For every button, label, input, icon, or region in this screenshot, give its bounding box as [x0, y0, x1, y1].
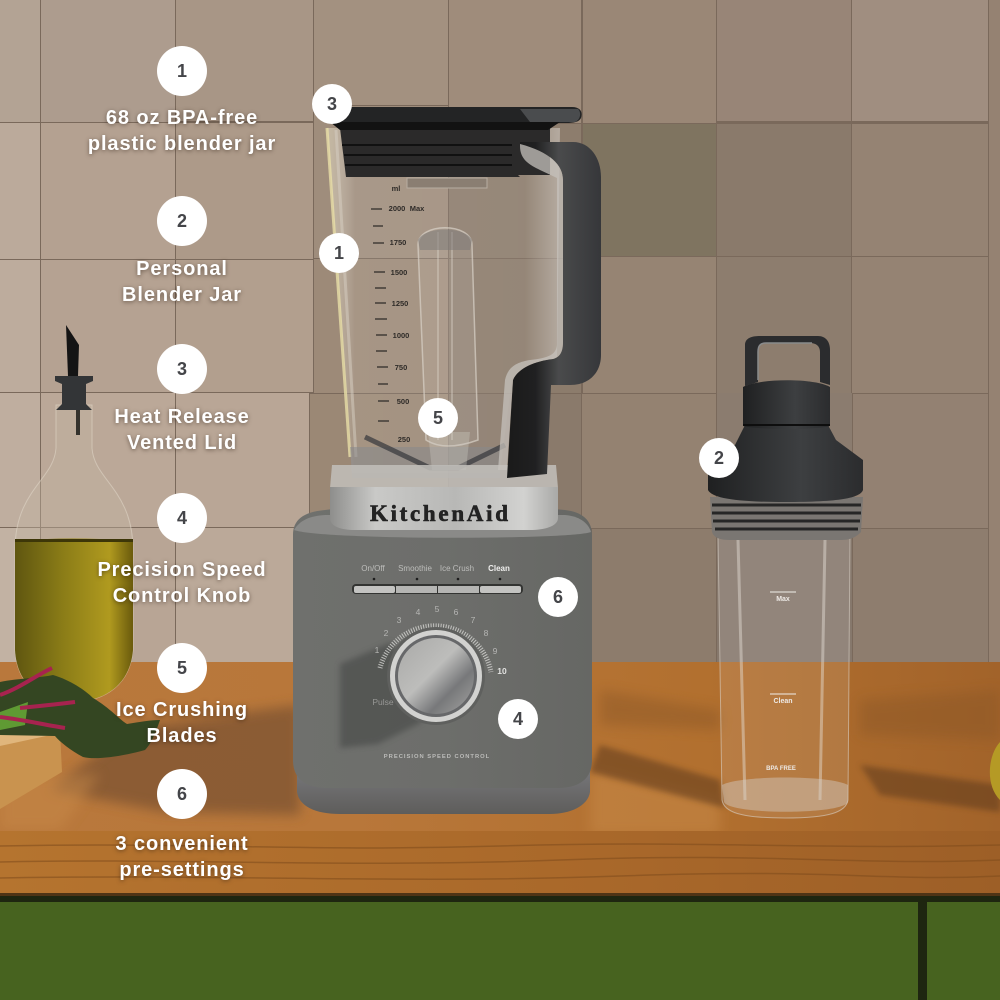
speed dial: 2 [384, 628, 389, 638]
scale marks [371, 209, 389, 421]
speed dial: Pulse [372, 697, 394, 707]
marker 4: 4 [513, 709, 523, 729]
steel collar [330, 487, 558, 530]
speed dial: 1 [375, 645, 380, 655]
blender jar: 1250 [392, 299, 408, 308]
marker 1 [319, 233, 359, 273]
blender jar: 500 [397, 397, 409, 406]
jar handle [507, 142, 601, 478]
preset labels: Clean [488, 564, 510, 573]
speed dial: 4 [416, 607, 421, 617]
lemon at right edge [990, 742, 1000, 800]
marker 3: 3 [327, 94, 337, 114]
feature 4: 4 [177, 508, 187, 528]
marker 1: 1 [334, 243, 344, 263]
blender jar: 1500 [391, 268, 407, 277]
blender jar: 1000 [393, 331, 409, 340]
speed dial: 6 [454, 607, 459, 617]
speed dial: 10 [497, 666, 507, 676]
marker 5 [418, 398, 458, 438]
feature 5: 5 [177, 658, 187, 678]
marker 2: 2 [714, 448, 724, 468]
feature 6 [115, 769, 249, 881]
marker 2 [699, 438, 739, 478]
feature 1: 68 oz BPA-free [106, 107, 258, 129]
feature 1: plastic blender jar [88, 133, 276, 155]
feature 6: 3 convenient [115, 833, 249, 855]
left feature list [88, 46, 276, 881]
preset buttons [352, 584, 523, 594]
speed dial: 5 [435, 604, 440, 614]
speed dial: 9 [493, 646, 498, 656]
feature 4: Precision Speed [97, 559, 267, 581]
blade tube [418, 228, 478, 446]
callout markers on product [312, 84, 739, 739]
feature 3 [114, 344, 250, 454]
marker 4 [498, 699, 538, 739]
feature 2: Personal [136, 258, 228, 280]
preset labels [361, 564, 510, 573]
brand name: KitchenAid [370, 501, 508, 526]
marker 6: 6 [553, 587, 563, 607]
blender jar [327, 128, 601, 488]
personal blender jar: Max [776, 596, 790, 603]
olive oil bottle [15, 325, 133, 702]
personal blender jar: Clean [773, 698, 793, 705]
blender jar: 2000 [389, 204, 405, 213]
feature 4 [97, 493, 267, 607]
blender jar: ml [392, 184, 400, 193]
tiled wall background [0, 0, 1000, 665]
marker 6 [538, 577, 578, 617]
blender jar: 1750 [390, 238, 406, 247]
beet leaves and cutting board [0, 668, 160, 809]
threads [710, 497, 863, 540]
speed dial: 7 [471, 615, 476, 625]
feature 6: pre-settings [119, 859, 245, 881]
preset indicator dots [373, 578, 501, 580]
speed dial [372, 604, 507, 725]
feature 3: Vented Lid [127, 432, 237, 454]
blender jar: 750 [395, 363, 407, 372]
feature 2: 2 [177, 211, 187, 231]
marker 5: 5 [433, 408, 443, 428]
preset labels: On/Off [361, 564, 385, 573]
personal blender jar [708, 336, 863, 818]
personal blender jar: BPA FREE [766, 766, 796, 772]
feature 2: Blender Jar [122, 284, 242, 306]
feature 1 [88, 46, 276, 155]
feature 6: 6 [177, 784, 187, 804]
preset labels: Ice Crush [440, 564, 474, 573]
blender jar: 250 [398, 435, 410, 444]
jar base and blades [350, 447, 500, 478]
feature 2 [122, 196, 242, 306]
blender [293, 107, 863, 818]
speed dial: 8 [484, 628, 489, 638]
cap [708, 336, 863, 502]
lid [330, 107, 582, 130]
feature 4: Control Knob [113, 585, 251, 607]
feature 3: Heat Release [114, 406, 250, 428]
knob shadow [340, 642, 422, 748]
blender base: PRECISION SPEED CONTROL [384, 754, 490, 760]
feature 3: 3 [177, 359, 187, 379]
feature 5: Ice Crushing [116, 699, 248, 721]
feature 1: 1 [177, 61, 187, 81]
blender jar: Max [410, 204, 425, 213]
gasket [340, 128, 550, 177]
blender base [293, 505, 592, 814]
preset labels: Smoothie [398, 564, 432, 573]
marker 3 [312, 84, 352, 124]
speed dial: 3 [397, 615, 402, 625]
feature 5 [116, 643, 248, 747]
wooden counter top [0, 662, 1000, 897]
green cabinet [0, 896, 1000, 1000]
feature 5: Blades [146, 725, 218, 747]
